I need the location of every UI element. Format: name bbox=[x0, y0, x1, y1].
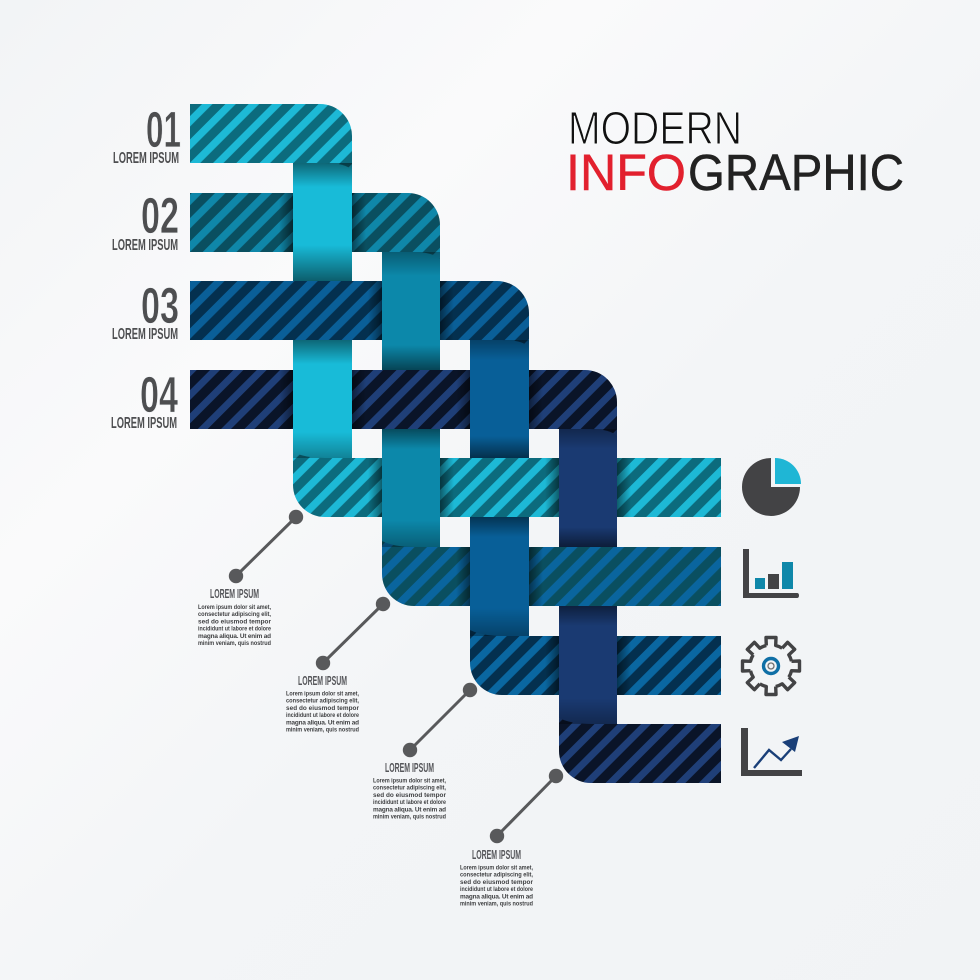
callout text 3: Lorem ipsum dolor sit amet, bbox=[373, 778, 446, 784]
band row 6 bbox=[382, 541, 721, 606]
callout 4 bbox=[460, 769, 563, 908]
band row 4 bbox=[190, 370, 617, 436]
callout text 3: incididunt ut labore et dolore bbox=[373, 799, 446, 806]
callout text 3: magna aliqua. Ut enim ad bbox=[373, 806, 446, 814]
callout 1 bbox=[198, 510, 303, 647]
icon: growth line chart bbox=[741, 728, 802, 776]
label 01 bbox=[113, 101, 181, 167]
vertical strip 1 bbox=[293, 163, 352, 458]
callout text 2: Lorem ipsum dolor sit amet, bbox=[286, 690, 359, 698]
label 04 bbox=[111, 366, 178, 432]
callout text 4: Lorem ipsum dolor sit amet, bbox=[460, 864, 533, 872]
label 01: 01 bbox=[146, 101, 181, 158]
title line: MODERN: MODERN bbox=[568, 102, 742, 154]
vertical strip 4 bbox=[559, 429, 617, 724]
label 04: 04 bbox=[140, 366, 178, 423]
label 03: 03 bbox=[141, 277, 179, 334]
band row 1 bbox=[190, 104, 352, 170]
callout text 1: LOREM IPSUM bbox=[210, 586, 259, 601]
callout text 3: sed do eiusmod tempor bbox=[373, 792, 446, 799]
callout text 4: minim veniam, quis nostrud bbox=[460, 900, 533, 908]
callout 3 bbox=[373, 683, 477, 820]
callout text 1: consectetur adipiscing elit, bbox=[198, 611, 271, 618]
band row 8 bbox=[559, 718, 721, 783]
band row 7 bbox=[470, 630, 721, 695]
callout text 3 bbox=[373, 760, 446, 820]
callout text 4: sed do eiusmod tempor bbox=[460, 879, 534, 886]
title bbox=[566, 102, 904, 201]
label 03 bbox=[112, 277, 179, 343]
left number labels bbox=[111, 101, 181, 432]
label 02: LOREM IPSUM bbox=[112, 237, 178, 254]
connector 3 bbox=[403, 683, 477, 757]
vertical strip 2 bbox=[382, 252, 440, 547]
callout text 1: magna aliqua. Ut enim ad bbox=[198, 633, 271, 640]
label 03: LOREM IPSUM bbox=[112, 326, 178, 343]
icon: gear bbox=[742, 638, 800, 694]
connector 1 bbox=[229, 510, 303, 583]
callout text 2: LOREM IPSUM bbox=[298, 673, 347, 688]
callout text 1 bbox=[198, 586, 272, 647]
label 04: LOREM IPSUM bbox=[111, 415, 177, 432]
callout 2 bbox=[286, 597, 390, 734]
callout text 3: consectetur adipiscing elit, bbox=[373, 784, 446, 792]
label 02: 02 bbox=[141, 187, 179, 244]
label 01: LOREM IPSUM bbox=[113, 150, 179, 167]
callout text 1: incididunt ut labore et dolore bbox=[198, 626, 271, 632]
callout text 3: LOREM IPSUM bbox=[385, 760, 434, 775]
callout text 1: minim veniam, quis nostrud bbox=[198, 640, 271, 647]
title line: INFOGRAPHIC: GRAPHIC bbox=[688, 144, 904, 201]
callout text 1: sed do eiusmod tempor bbox=[198, 618, 272, 626]
callout text 3: minim veniam, quis nostrud bbox=[373, 814, 446, 820]
band row 5 bbox=[293, 452, 721, 517]
icon: bar chart bbox=[743, 549, 799, 598]
callout text 2: minim veniam, quis nostrud bbox=[286, 726, 359, 734]
title line: INFOGRAPHIC bbox=[566, 144, 904, 201]
callout text 4 bbox=[460, 847, 534, 908]
label 02 bbox=[112, 187, 179, 254]
strip shading bbox=[293, 163, 617, 724]
callout text 1: Lorem ipsum dolor sit amet, bbox=[198, 604, 271, 611]
callout text 2: incididunt ut labore et dolore bbox=[286, 712, 359, 719]
connector 4 bbox=[490, 769, 563, 843]
callout text 4: LOREM IPSUM bbox=[472, 847, 521, 862]
connector 2 bbox=[316, 597, 390, 670]
callout text 4: magna aliqua. Ut enim ad bbox=[460, 894, 533, 900]
shadows cast on bands by vertical strips bbox=[279, 193, 631, 695]
callout text 4: incididunt ut labore et dolore bbox=[460, 886, 533, 893]
woven ribbons bbox=[190, 104, 721, 783]
band row 2 bbox=[190, 193, 440, 259]
icon: pie chart bbox=[742, 458, 801, 516]
vertical strip 3 bbox=[470, 340, 529, 636]
band row 3 bbox=[190, 281, 529, 347]
callout text 4: consectetur adipiscing elit, bbox=[460, 872, 533, 878]
title line: INFOGRAPHIC: INFO bbox=[566, 144, 686, 201]
callout text 2: sed do eiusmod tempor bbox=[286, 705, 360, 712]
callout text 2 bbox=[286, 673, 360, 734]
callout text 2: magna aliqua. Ut enim ad bbox=[286, 720, 359, 726]
band overlaps passing over the strips bbox=[293, 281, 617, 606]
callout text 2: consectetur adipiscing elit, bbox=[286, 698, 359, 704]
